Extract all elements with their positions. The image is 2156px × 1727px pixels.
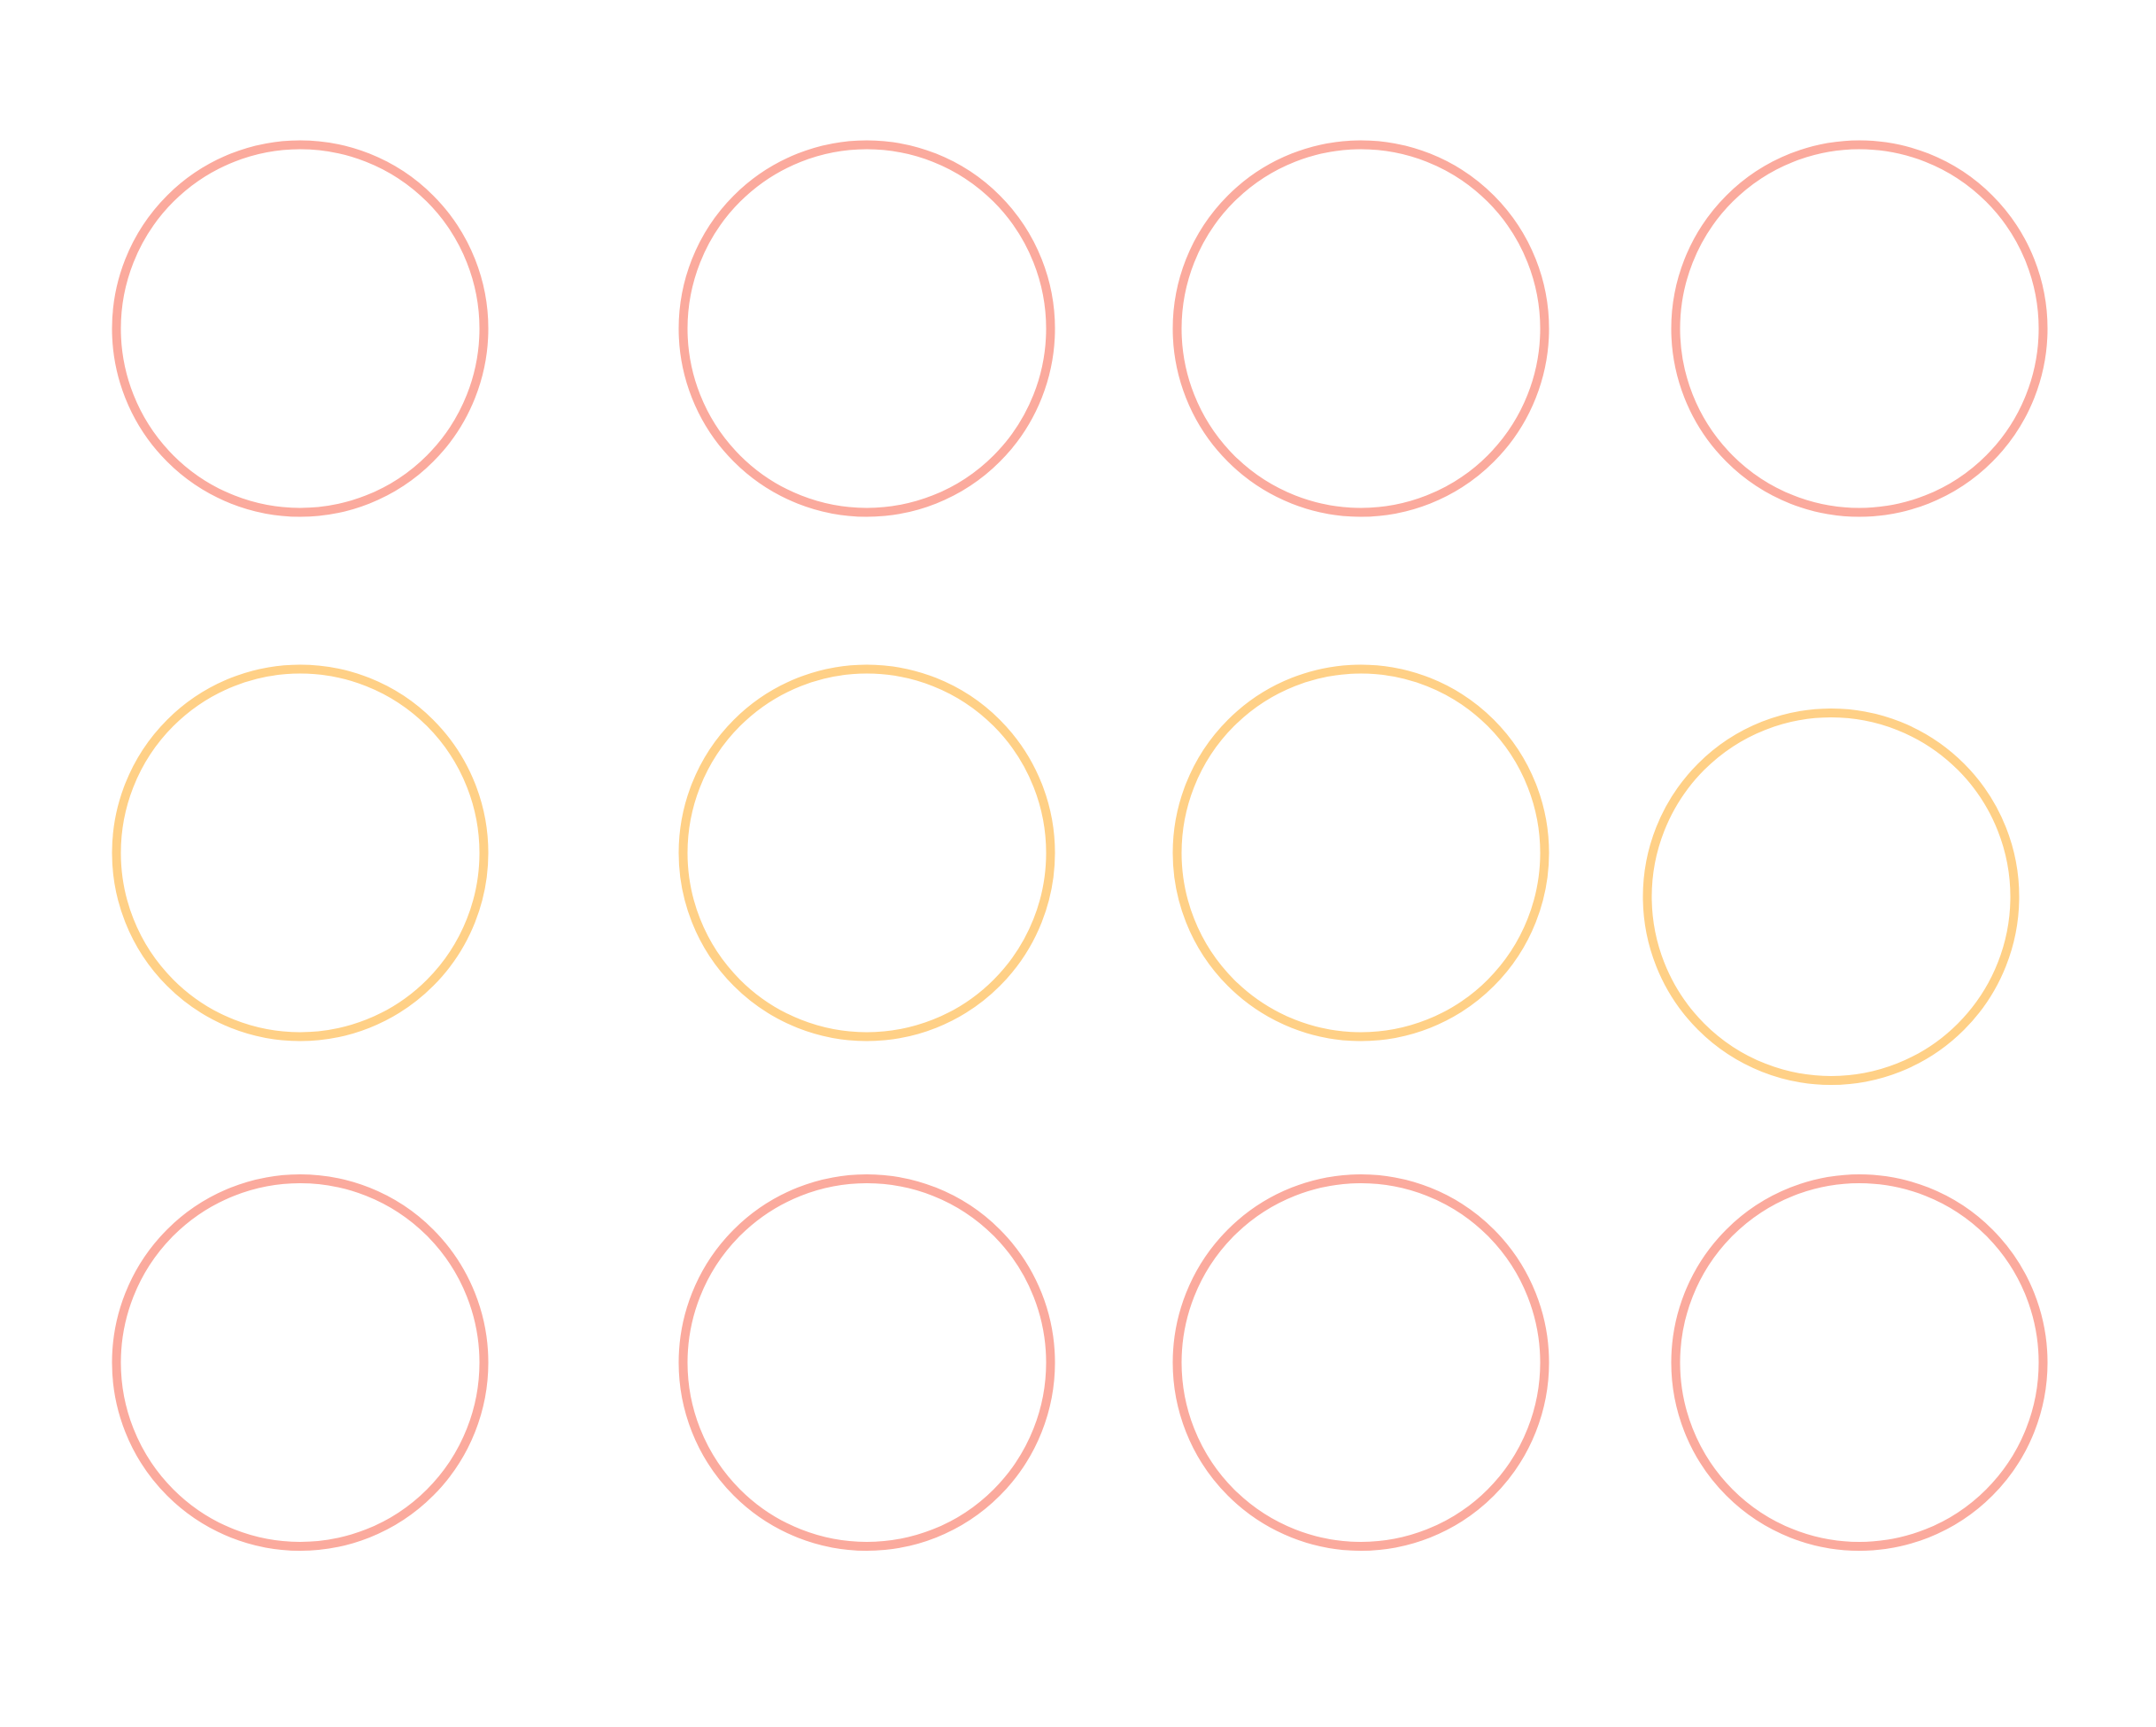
circle r1c3 — [1178, 145, 1544, 512]
circle r1c4 — [1675, 145, 2044, 512]
circle r2c2 — [684, 670, 1050, 1036]
circle r2c3 — [1178, 670, 1544, 1036]
circle r2c4 — [1647, 713, 2015, 1080]
row 1: coral circles — [117, 145, 2044, 512]
row 3: coral circles — [117, 1179, 2044, 1546]
circle r1c2 — [684, 145, 1050, 512]
row 2: amber circles — [117, 670, 2015, 1080]
circle r3c1 — [117, 1179, 483, 1546]
circle r3c3 — [1178, 1179, 1544, 1546]
circle r3c4 — [1675, 1179, 2044, 1546]
circle r1c1 — [117, 145, 483, 512]
circle r3c2 — [684, 1179, 1050, 1546]
circle r2c1 — [117, 670, 483, 1036]
